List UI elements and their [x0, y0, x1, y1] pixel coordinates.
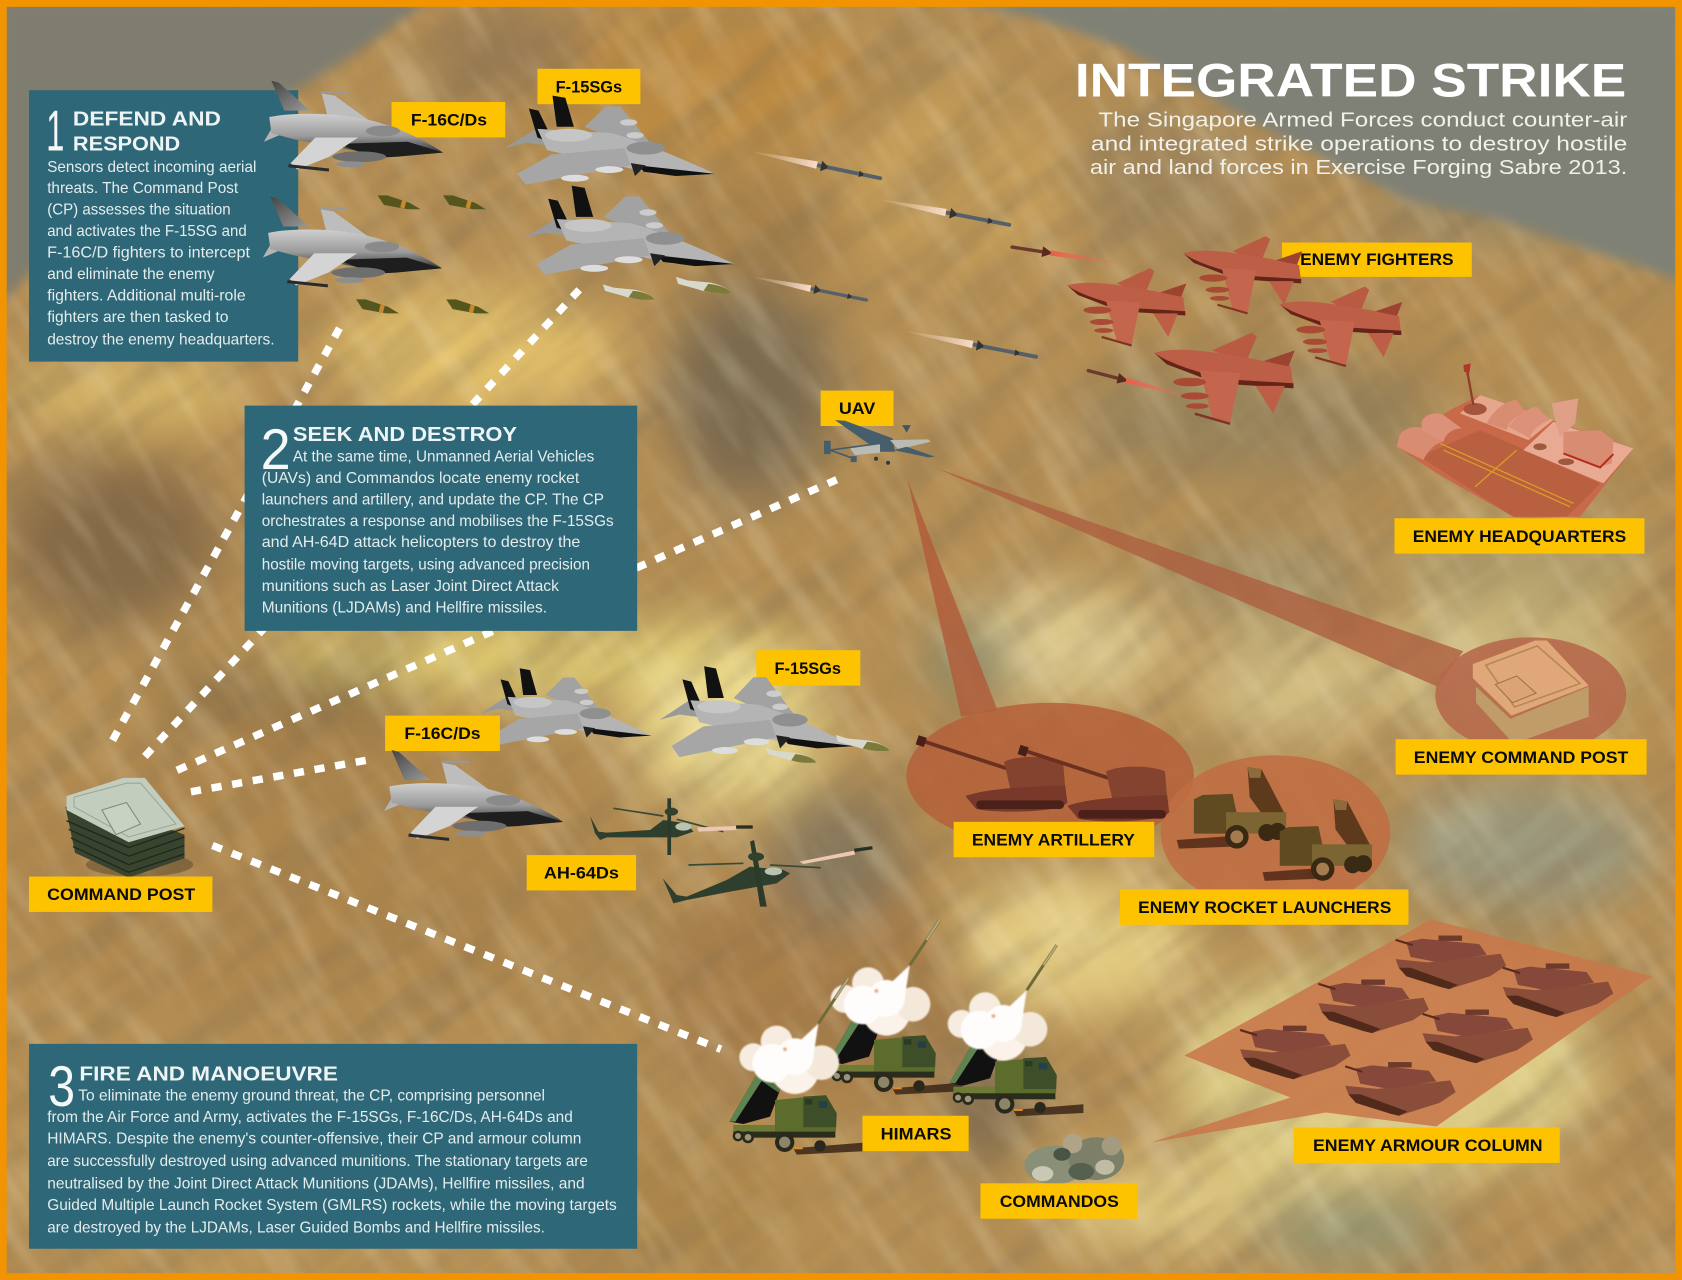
label: HIMARS: HIMARS [881, 1124, 951, 1143]
enemy command post building [1473, 641, 1589, 740]
label: F-16C/Ds upper [392, 102, 505, 137]
label: enemy rocket launchers [1120, 889, 1408, 925]
panel 1: defend and respond: (CP) assesses the situation [47, 201, 231, 219]
panel 3: fire and manoeuvre [29, 1044, 637, 1249]
label: HIMARS [862, 1116, 969, 1151]
panel 3: fire and manoeuvre: are destroyed by the LJDAMs, Laser Guided Bombs and Hellfire missiles. [47, 1219, 545, 1237]
F-16 lower [384, 750, 563, 841]
panel 2: seek and destroy: orchestrates a response and mobilises the F-15SGs [262, 512, 614, 530]
label: enemy fighters [1282, 243, 1472, 277]
UAV [824, 420, 935, 465]
HIMARS launchers [729, 920, 1083, 1155]
label: enemy artillery [954, 822, 1154, 857]
label: F-15SGs lower: F-15SGs [774, 659, 841, 678]
panel 3: fire and manoeuvre: FIRE AND MANOEUVRE [79, 1063, 338, 1085]
panel 3: fire and manoeuvre: 3 [48, 1055, 75, 1119]
subtitle: The Singapore Armed Forces conduct counter-air [1098, 110, 1628, 132]
panel 2: seek and destroy [245, 406, 637, 631]
panel 1: defend and respond: Sensors detect incoming aerial [47, 158, 256, 176]
enemy highlight areas [906, 468, 1652, 1143]
label: commandos [980, 1183, 1137, 1219]
AH-64D helicopters [590, 798, 873, 907]
label: enemy command post: ENEMY COMMAND POST [1414, 748, 1628, 767]
panel 2: seek and destroy: At the same time, Unmanned Aerial Vehicles [293, 447, 594, 465]
label: F-15SGs lower [756, 650, 860, 686]
panel 3: fire and manoeuvre: from the Air Force and Army, activates the F-15SGs, F-16C/Ds, AH-64Ds and [47, 1108, 573, 1126]
panel 2: seek and destroy: launchers and artillery, and update the CP. The CP [262, 490, 604, 508]
panel 3: fire and manoeuvre: Guided Multiple Launch Rocket System (GMLRS) rockets, while the moving targets [47, 1196, 617, 1214]
panel 2: seek and destroy: 2 [261, 418, 291, 482]
panel 3: fire and manoeuvre: are successfully destroyed using advanced munitions. The stationary targets are [47, 1152, 588, 1170]
label: enemy artillery: ENEMY ARTILLERY [972, 830, 1135, 849]
panel 1: defend and respond: 1 [46, 99, 64, 163]
panel 1: defend and respond: F-16C/D fighters to intercept [47, 244, 250, 262]
label: F-16C/Ds lower: F-16C/Ds [404, 724, 481, 743]
label: F-15SGs upper [537, 69, 640, 104]
label: enemy fighters: ENEMY FIGHTERS [1300, 250, 1454, 269]
panel 3: fire and manoeuvre: To eliminate the enemy ground threat, the CP, comprising personnel [78, 1087, 545, 1105]
panel 1: defend and respond: and activates the F-15SG and [47, 222, 247, 240]
label: enemy rocket launchers: ENEMY ROCKET LAUNCHERS [1138, 898, 1391, 917]
panel 1: defend and respond: threats. The Command Post [47, 179, 239, 197]
label: AH-64Ds [527, 855, 636, 890]
panel 3: fire and manoeuvre: HIMARS. Despite the enemy's counter-offensive, their CP and armour column [47, 1130, 581, 1148]
panel 1: defend and respond: destroy the enemy headquarters. [47, 330, 275, 348]
label: enemy armour column [1294, 1128, 1560, 1163]
enemy fighters [1067, 236, 1402, 424]
friendly fighters upper [263, 81, 735, 287]
label: UAV [821, 391, 894, 426]
panel 1: defend and respond: fighters. Additional multi-role [47, 286, 246, 304]
label: command post: COMMAND POST [47, 885, 195, 904]
label: enemy armour column: ENEMY ARMOUR COLUMN [1313, 1136, 1543, 1155]
label: command post [29, 877, 212, 912]
panel 2: seek and destroy: (UAVs) and Commandos locate enemy rocket [262, 469, 580, 487]
label: UAV: UAV [839, 399, 875, 418]
label: enemy command post [1396, 739, 1647, 775]
subtitle: and integrated strike operations to destroy hostile [1091, 133, 1627, 155]
enemy artillery [916, 735, 1169, 821]
bombs upper [356, 195, 731, 313]
enemy rocket launchers [1177, 767, 1372, 881]
label: enemy headquarters [1395, 518, 1644, 554]
subtitle [1090, 110, 1628, 179]
JDAM bombs lower [766, 735, 890, 763]
panel 1: defend and respond [29, 90, 298, 362]
commandos [1024, 1134, 1124, 1184]
title: INTEGRATED STRIKE [1075, 55, 1626, 108]
air to air missiles [744, 145, 1039, 362]
panel 2: seek and destroy: Munitions (LJDAMs) and Hellfire missiles. [262, 599, 547, 617]
label: enemy headquarters: ENEMY HEADQUARTERS [1413, 527, 1626, 546]
enemy missiles [1010, 242, 1192, 402]
dashed link lines [113, 290, 837, 1049]
enemy headquarters [1397, 363, 1633, 517]
panel 1: defend and respond: and eliminate the enemy [47, 265, 215, 283]
panel 1: defend and respond: fighters are then tasked to [47, 308, 229, 326]
enemy armour column [1240, 936, 1613, 1116]
command post [65, 778, 193, 878]
subtitle: air and land forces in Exercise Forging Sabre 2013. [1090, 157, 1627, 179]
panel 2: seek and destroy: munitions such as Laser Joint Direct Attack [262, 577, 560, 595]
panel 2: seek and destroy: hostile moving targets, using advanced precision [262, 556, 590, 574]
label: F-16C/Ds upper: F-16C/Ds [411, 111, 487, 130]
friendly fighters lower [481, 666, 854, 757]
panel 1: defend and respond: RESPOND [73, 133, 180, 155]
panel 2: seek and destroy: SEEK AND DESTROY [293, 424, 517, 446]
panel 2: seek and destroy: and AH-64D attack helicopters to destroy the [262, 533, 580, 551]
label: F-16C/Ds lower [385, 716, 500, 751]
label: F-15SGs upper: F-15SGs [556, 77, 622, 96]
label: commandos: COMMANDOS [1000, 1192, 1119, 1211]
label: AH-64Ds: AH-64Ds [544, 864, 619, 883]
panel 3: fire and manoeuvre: neutralised by the Joint Direct Attack Munitions (JDAMs), Hellfire missiles, and [47, 1175, 585, 1193]
panel 1: defend and respond: DEFEND AND [73, 109, 221, 131]
